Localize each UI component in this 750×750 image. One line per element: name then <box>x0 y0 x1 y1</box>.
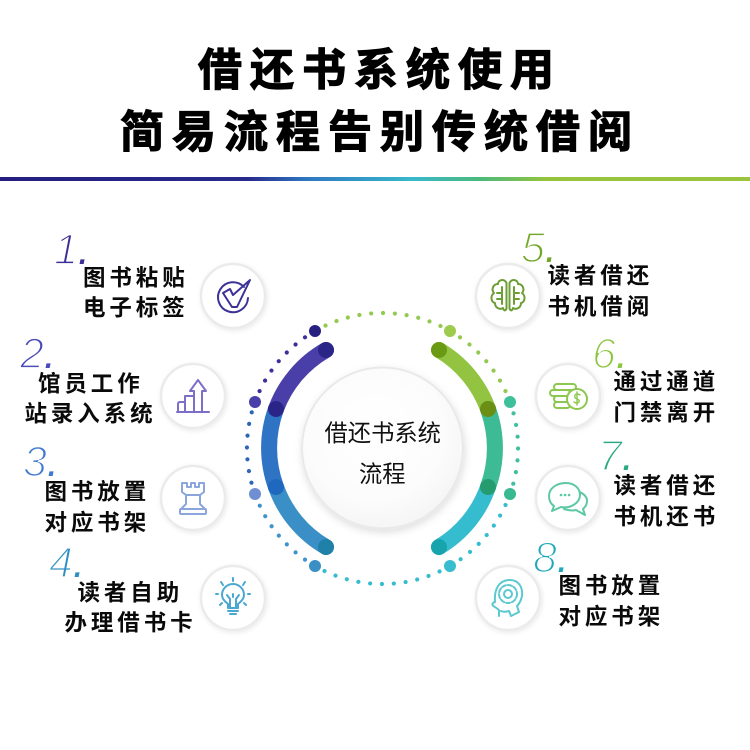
label 7 <box>614 474 719 530</box>
item 7 <box>536 432 719 530</box>
number 7: 7. <box>598 432 634 480</box>
number 6: 6. <box>592 330 628 378</box>
item 1 <box>54 226 265 328</box>
number 5: 5. <box>521 224 557 272</box>
number 8: 8. <box>533 534 569 582</box>
title: 简易流程告别传统借阅 <box>120 108 640 157</box>
label 6 <box>614 370 719 426</box>
label 1 <box>83 266 189 320</box>
central circle: 借还书系统 <box>324 420 441 446</box>
title: 借还书系统使用 <box>198 46 562 95</box>
label 5: 读者借还 <box>548 264 653 288</box>
label 4: 读者自助 <box>78 580 183 606</box>
item 4 <box>49 539 265 636</box>
title <box>120 46 640 157</box>
central circle: 流程 <box>359 461 406 487</box>
label 5 <box>548 264 653 320</box>
icon circle: bar chart arrow <box>161 364 225 428</box>
label 4 <box>64 580 197 636</box>
label 5: 书机借阅 <box>548 294 653 320</box>
label 4: 办理借书卡 <box>64 610 197 636</box>
number 4: 4. <box>49 539 85 587</box>
central circle <box>302 368 463 528</box>
thick arc segments <box>268 342 496 555</box>
label 6: 通过通道 <box>614 370 719 394</box>
label 2 <box>24 372 157 426</box>
icon circle: coins <box>536 364 600 428</box>
icon circle: light bulb <box>201 566 265 630</box>
item 3 <box>23 438 225 536</box>
dotted ring nodes <box>249 325 516 572</box>
item 2 <box>19 330 225 428</box>
label 8: 图书放置 <box>558 574 664 598</box>
icon circle: chat bubbles <box>536 466 600 530</box>
label 3: 对应书架 <box>44 510 150 536</box>
item 6 <box>536 330 719 428</box>
number 2: 2. <box>19 330 56 378</box>
number 3: 3. <box>23 438 59 486</box>
label 7: 书机还书 <box>614 504 719 530</box>
ring diagram <box>247 313 518 584</box>
number 1: 1. <box>54 226 90 274</box>
label 7: 读者借还 <box>614 474 719 498</box>
label 3 <box>44 480 150 536</box>
item 8 <box>476 534 664 630</box>
icon circle: brain <box>476 264 540 328</box>
icon circle: check mark <box>201 264 265 328</box>
item 5 <box>476 224 653 328</box>
label 8: 对应书架 <box>558 604 664 630</box>
label 2: 馆员工作 <box>38 372 144 396</box>
label 6: 门禁离开 <box>614 400 719 426</box>
label 1: 电子标签 <box>83 296 189 320</box>
icon circle: rook <box>161 466 225 530</box>
label 3: 图书放置 <box>44 480 150 504</box>
gradient divider bar <box>0 177 750 181</box>
dotted outer ring <box>247 313 518 584</box>
label 1: 图书粘贴 <box>83 266 189 290</box>
label 2: 站录入系统 <box>24 402 157 426</box>
icon circle: head with gear <box>476 566 540 630</box>
label 8 <box>558 574 664 630</box>
